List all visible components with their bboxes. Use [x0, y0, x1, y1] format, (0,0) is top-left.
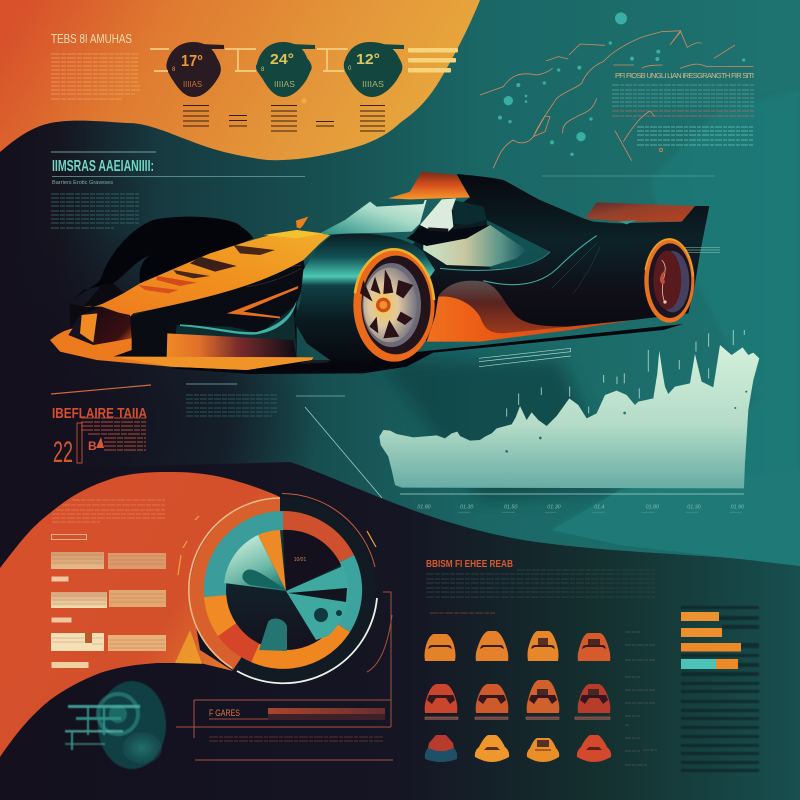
nose box [93, 308, 132, 347]
heading: section title teal: IIMSRAS AAEIANIIII: [52, 158, 154, 175]
cockpit side panel [423, 225, 527, 267]
wedge: teal right [286, 566, 348, 640]
wedge: dark top right [283, 530, 341, 591]
text block: top left paragraph [51, 54, 140, 99]
front arch dark [69, 217, 253, 303]
front block [167, 333, 297, 358]
side panel dark red [438, 281, 570, 335]
chart ticks [507, 330, 744, 417]
axis labels: 01.50 [504, 504, 517, 510]
text block: bottom label: F GARES [209, 708, 240, 718]
teal side lines [440, 236, 600, 293]
panel heading: top left: TEBS 8I AMUHAS [51, 31, 132, 46]
icon: engine wheel [65, 681, 166, 769]
callout: stat 3: 0 [348, 66, 352, 72]
chart: donut: 10/01 [294, 557, 306, 563]
text block: bottom label [209, 708, 385, 741]
callout: stat 3: 12° [356, 51, 380, 68]
callout: stat 1: 8 [172, 67, 176, 73]
callout: stat 1: 17° [181, 53, 203, 70]
side sill orange [427, 296, 633, 342]
windscreen [317, 200, 427, 235]
row 2 dashes [425, 717, 610, 719]
callout: stat 2: 8 [261, 67, 265, 73]
callout: stat 2: IIIIAS [274, 80, 295, 89]
legend: faint labels beside icons [625, 632, 657, 765]
chart axis [400, 493, 744, 495]
speed lines [685, 247, 720, 253]
warm glow triangle [175, 630, 202, 664]
front fender [293, 234, 435, 363]
bump strips [242, 569, 286, 590]
text block: lists under stats [183, 106, 385, 131]
axis labels: 01.80 [646, 504, 659, 510]
wedge: pale [224, 535, 286, 591]
legend rows: cream bars [51, 534, 166, 668]
illustration: racing car [50, 172, 720, 374]
chart: white area chart [379, 330, 759, 512]
text block: section paragraph [51, 194, 139, 228]
row 1 icons [424, 631, 610, 661]
text block: lower panel intro [52, 500, 165, 522]
car icons grid [424, 631, 611, 762]
mirror [296, 217, 308, 229]
rear scoop [388, 172, 470, 199]
text block: middle paragraph [186, 384, 345, 416]
chart lines: top right network [480, 12, 753, 168]
rear wing [585, 202, 695, 222]
frame: bottom panel lines [176, 592, 393, 760]
bars: top yellow legend [408, 48, 458, 72]
axis labels: 01.90 [731, 504, 744, 510]
front splitter [50, 328, 313, 370]
text block: red stats [51, 385, 151, 469]
panel: lower orange wave [0, 472, 280, 757]
axis labels: 01.4 [594, 504, 605, 510]
teal body tint [487, 220, 550, 269]
axis labels: 01.80 [417, 504, 431, 510]
outer thin arcs [189, 498, 280, 668]
heading: section title teal: Barriers Erotic Graveses [52, 180, 113, 186]
text block: red stats: IBEFLAIRE TAIIA [52, 405, 147, 422]
rear wheel [644, 238, 694, 323]
callout: stat 3 [344, 42, 404, 97]
axis labels: 01.30 [687, 504, 701, 510]
row 2 icons [425, 680, 610, 713]
callout: stat 3: IIIIAS [362, 80, 384, 89]
axis labels: 01.30 [460, 504, 473, 510]
donut ring segments [283, 511, 354, 590]
nose [83, 230, 330, 317]
callout: stat 1 [150, 42, 256, 97]
text block: car gallery paragraph [426, 570, 655, 613]
row 3 icons [425, 735, 611, 762]
vents [138, 245, 275, 293]
cockpit dark [453, 200, 487, 225]
front wheel [353, 248, 435, 362]
heading: car gallery: BBISM FI EHEE REAB [426, 559, 513, 570]
icon: orange dot [302, 98, 306, 104]
rear body [397, 174, 709, 342]
disc inner [226, 530, 346, 650]
car shadow [170, 324, 683, 374]
lower body [113, 260, 307, 357]
text block: red stats: 22 [53, 436, 73, 469]
callout: stat 2 [256, 42, 348, 97]
text block: top right paragraph [542, 85, 754, 176]
text block: top right heading: PFI FIOSB UNGLI LIAN IRESGRANGTH FIR SITI [615, 71, 754, 80]
chart: donut [178, 494, 377, 683]
heading: section title teal [51, 152, 305, 186]
row 4 [52, 662, 88, 668]
axis labels: 01.30 [547, 504, 561, 510]
panel: top orange wave [0, 0, 480, 160]
row 1 [51, 534, 166, 569]
dark ring background [190, 497, 376, 683]
diagonal pointer line [305, 407, 382, 498]
floor stripes [479, 348, 571, 367]
bar chart: right [681, 606, 759, 772]
row 3 [51, 618, 166, 651]
text block: red stats: B [88, 439, 97, 453]
wedge: orange [258, 530, 286, 591]
callout: stat 2: 24° [270, 51, 294, 68]
row 2 [51, 576, 166, 608]
axis labels [417, 504, 744, 510]
callout: stat 1: IIIIAS [183, 80, 202, 89]
